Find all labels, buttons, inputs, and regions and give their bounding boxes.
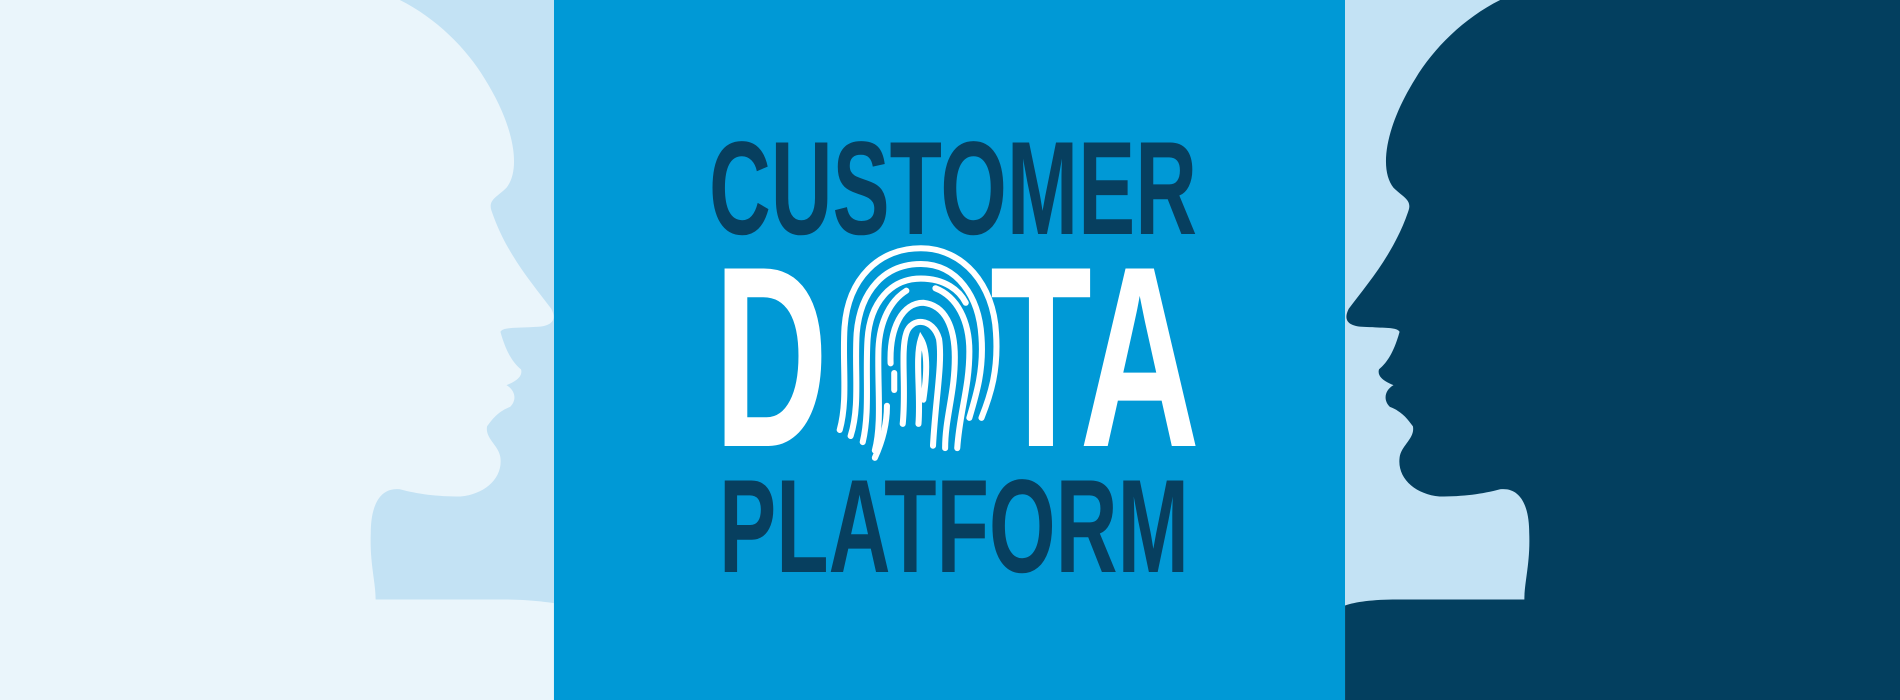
- title: TA: TA: [990, 212, 1200, 501]
- panel: right background: [1345, 0, 1900, 700]
- panel: left background: [0, 0, 554, 700]
- panel: center blue: [554, 0, 1345, 700]
- title: PLATFORM: PLATFORM: [719, 453, 1189, 601]
- icon: left light head silhouette: [0, 0, 554, 700]
- icon: right dark head silhouette: [1345, 0, 1900, 700]
- title: CUSTOMER: CUSTOMER: [709, 115, 1197, 263]
- icon: fingerprint as O: [840, 248, 996, 458]
- title: D: D: [714, 212, 828, 501]
